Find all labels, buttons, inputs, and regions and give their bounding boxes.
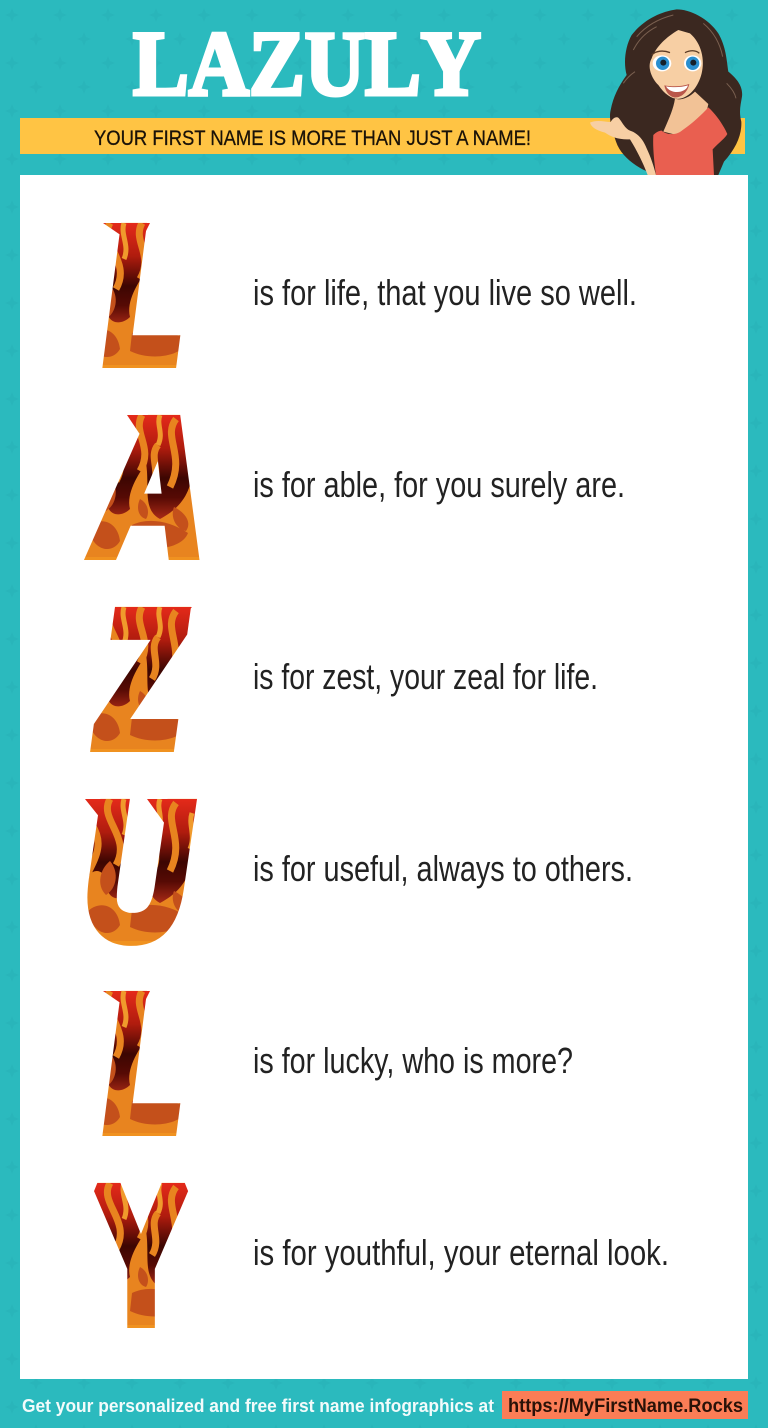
row 6 text: is for youthful, your eternal look. <box>253 1232 669 1273</box>
title: LAZULY <box>133 12 481 114</box>
row 6: flame letter Y: Y <box>95 1146 187 1364</box>
row 1: flame letter L <box>103 186 184 404</box>
row 5 text: is for lucky, who is more? <box>253 1040 573 1081</box>
subtitle banner <box>20 118 745 154</box>
footer call to action: Get your personalized and free first name infographics at <box>22 1396 494 1416</box>
row 5: flame letter L: L <box>104 954 184 1172</box>
footer url badge: https://MyFirstName.Rocks <box>508 1396 743 1417</box>
row 5: flame letter L <box>103 954 184 1172</box>
row 2 text: is for able, for you surely are. <box>253 464 625 505</box>
row 2: flame letter A: A <box>91 378 206 596</box>
row 3 text: is for zest, your zeal for life. <box>253 656 598 697</box>
row 4: flame letter U: U <box>83 762 192 980</box>
row 3: flame letter Z: Z <box>94 570 187 788</box>
subtitle banner: YOUR FIRST NAME IS MORE THAN JUST A NAME! <box>94 126 531 150</box>
illustration: smiling woman presenter <box>590 9 742 175</box>
white content card <box>20 175 748 1379</box>
row 1 text: is for life, that you live so well. <box>253 272 637 313</box>
row 1: flame letter L: L <box>104 186 184 404</box>
row 4 text: is for useful, always to others. <box>253 848 633 889</box>
